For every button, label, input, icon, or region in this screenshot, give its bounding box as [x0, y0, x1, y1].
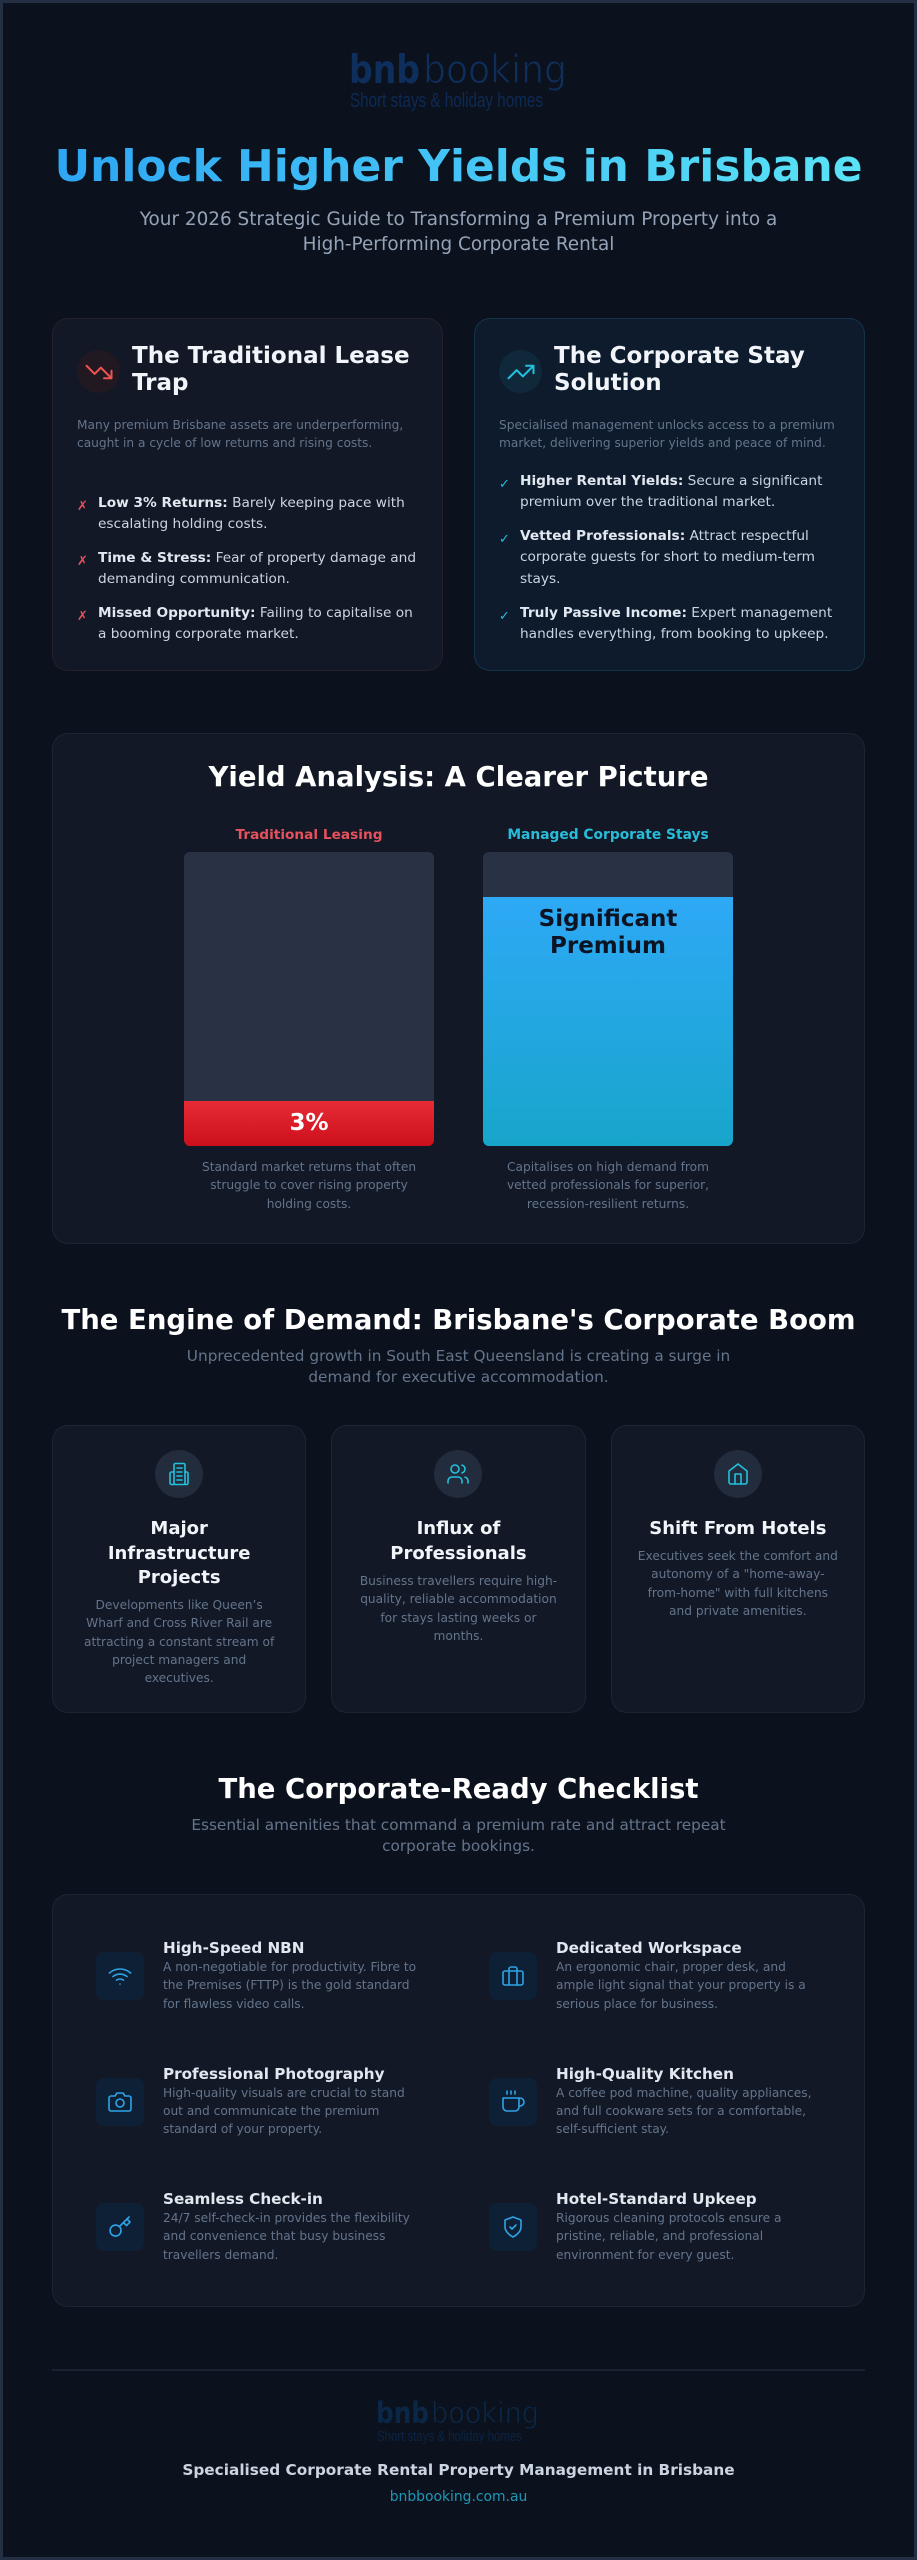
subheading: demand: demand for executive accommodation.	[308, 1368, 609, 1386]
card text: months.	[434, 1629, 483, 1643]
card text: for stays lasting weeks or	[380, 1611, 536, 1625]
caption: traditional: holding costs.	[267, 1197, 351, 1211]
heading: Trap	[132, 370, 188, 396]
icon: shield check	[489, 2203, 537, 2251]
list item: vetted professionals: stays.	[520, 570, 560, 586]
card text: Business travellers require high-	[360, 1574, 557, 1588]
description: caught in a cycle of low returns and rising costs.	[77, 436, 372, 450]
heading	[132, 342, 410, 396]
item text	[556, 1960, 806, 2011]
list item: missed opportunity	[98, 604, 413, 642]
item text	[556, 2211, 782, 2262]
item text	[163, 2211, 410, 2262]
logo: bnbbooking header: bnb	[349, 48, 420, 93]
item title: Seamless Check-in	[163, 2190, 323, 2208]
item title: High-Speed NBN	[163, 1939, 304, 1957]
panel: corporate stay solution	[474, 318, 865, 671]
item text: serious place for business.	[556, 1997, 718, 2011]
heading: engine of demand: The Engine of Demand: Brisbane's Corporate Boom	[61, 1304, 856, 1336]
list item: missed opportunity: Missed Opportunity: Failing to capitalise on	[98, 604, 413, 620]
marker: ✗	[77, 554, 88, 569]
item: upkeep	[489, 2190, 782, 2262]
subtitle: High-Performing Corporate Rental	[303, 234, 614, 255]
item text: Rigorous cleaning protocols ensure a	[556, 2211, 782, 2225]
item text: ample light signal that your property is a	[556, 1978, 806, 1992]
heading: checklist: The Corporate-Ready Checklist	[218, 1773, 699, 1805]
panel: shift from hotels	[611, 1425, 865, 1713]
logo: footer: bnb	[376, 2396, 429, 2430]
card text: attracting a constant stream of	[84, 1635, 274, 1649]
heading: The Corporate Stay	[554, 342, 805, 368]
icon: users	[434, 1450, 482, 1498]
fill: significant premium: Premium	[550, 933, 666, 959]
caption: managed	[507, 1160, 709, 1211]
card heading: Professionals	[390, 1542, 527, 1564]
footer link: bnbbooking.com.au	[390, 2489, 527, 2505]
caption: traditional	[202, 1160, 416, 1211]
caption: managed: recession-resilient returns.	[527, 1197, 689, 1211]
item text: out and communicate the premium	[163, 2104, 379, 2118]
heading: Solution	[554, 370, 662, 396]
list item: time and stress: Time & Stress: Fear of property damage and	[98, 550, 416, 566]
marker: ✗	[77, 499, 88, 514]
item: professional photography	[96, 2064, 405, 2136]
heading	[554, 342, 805, 396]
list item: higher yields: premium over the traditional market.	[520, 494, 775, 510]
subtitle	[140, 209, 777, 255]
icon: briefcase	[489, 1952, 537, 2000]
list item: vetted professionals	[520, 528, 815, 586]
card heading	[390, 1518, 527, 1564]
description: Many premium Brisbane assets are underperforming,	[77, 418, 403, 432]
icon: camera	[96, 2078, 144, 2126]
caption: traditional: struggle to cover rising property	[210, 1178, 408, 1192]
card heading	[108, 1518, 250, 1588]
icon: wifi	[96, 1952, 144, 2000]
item text: for flawless video calls.	[163, 1997, 305, 2011]
item title: Hotel-Standard Upkeep	[556, 2190, 757, 2208]
card text: Executives seek the comfort and	[638, 1549, 838, 1563]
item text: pristine, reliable, and professional	[556, 2229, 763, 2243]
fill: 3%	[184, 1101, 434, 1146]
item text	[556, 2086, 811, 2136]
subheading: demand: Unprecedented growth in South East Queensland is creating a surge in	[187, 1347, 730, 1365]
marker: ✗	[77, 609, 88, 624]
fill: significant premium	[483, 897, 733, 1146]
card text: Wharf and Cross River Rail are	[86, 1616, 272, 1630]
item text: A non-negotiable for productivity. Fibre to	[163, 1960, 416, 1974]
item text: environment for every guest.	[556, 2248, 734, 2262]
icon: home	[714, 1450, 762, 1498]
list item: higher yields	[520, 472, 822, 510]
description	[77, 418, 403, 450]
fill: significant premium: Significant	[539, 906, 677, 932]
footer text: Specialised Corporate Rental Property Management in Brisbane	[182, 2461, 735, 2479]
item: dedicated workspace	[489, 1939, 806, 2011]
subtitle: Your 2026 Strategic Guide to Transforming a Premium Property into a	[140, 209, 777, 230]
subheading: checklist: Essential amenities that command a premium rate and attract repeat	[191, 1816, 726, 1834]
card text: project managers and	[112, 1653, 246, 1667]
list item: passive income	[520, 604, 832, 642]
list item: low returns: escalating holding costs.	[98, 516, 267, 532]
bar: traditional 3%	[184, 852, 434, 1146]
panel: professionals	[331, 1425, 586, 1713]
item text: An ergonomic chair, proper desk, and	[556, 1960, 786, 1974]
list item: vetted professionals: corporate guests for short to medium-term	[520, 549, 815, 565]
list item: passive income: handles everything, from booking to upkeep.	[520, 626, 829, 642]
card text: from-home" with full kitchens	[648, 1586, 828, 1600]
subheading: demand	[187, 1347, 730, 1386]
card heading: Shift From Hotels	[649, 1518, 826, 1539]
card heading: Projects	[138, 1567, 221, 1588]
card text	[638, 1549, 838, 1618]
description: Specialised management unlocks access to a premium	[499, 418, 835, 432]
item text: standard of your property.	[163, 2122, 322, 2136]
panel: yield analysis	[52, 733, 865, 1244]
card text	[360, 1574, 557, 1643]
bar: managed corporate	[483, 852, 733, 1146]
icon: trending down	[77, 350, 120, 393]
item text	[163, 2086, 405, 2136]
item text: High-quality visuals are crucial to stand	[163, 2086, 405, 2100]
item text: and full cookware sets for a comfortable,	[556, 2104, 806, 2118]
card text	[84, 1598, 274, 1685]
list item: vetted professionals: Vetted Professionals: Attract respectful	[520, 528, 809, 544]
icon: trending up	[499, 350, 542, 393]
list item: time and stress: demanding communication.	[98, 571, 290, 587]
subheading: checklist	[191, 1816, 726, 1855]
item: high-speed NBN	[96, 1939, 416, 2011]
caption: traditional: Standard market returns that often	[202, 1160, 416, 1174]
item text: A coffee pod machine, quality appliances,	[556, 2086, 811, 2100]
caption: managed: vetted professionals for superior,	[507, 1178, 709, 1192]
item title: Dedicated Workspace	[556, 1939, 742, 1957]
card heading: Infrastructure	[108, 1542, 250, 1564]
logo: footer	[376, 2396, 539, 2445]
marker: ✓	[499, 532, 510, 547]
icon: building	[155, 1450, 203, 1498]
item text	[163, 1960, 416, 2011]
item title: High-Quality Kitchen	[556, 2064, 734, 2082]
subheading: checklist: corporate bookings.	[382, 1837, 535, 1855]
icon: key	[96, 2203, 144, 2251]
card text: executives.	[145, 1671, 214, 1685]
item: kitchen	[489, 2064, 811, 2136]
item text: and convenience that busy business	[163, 2229, 385, 2243]
panel: infrastructure	[52, 1425, 306, 1713]
card text: quality, reliable accommodation	[360, 1592, 557, 1606]
heading: yield analysis: Yield Analysis: A Clearer Picture	[208, 761, 709, 793]
heading: The Traditional Lease	[132, 342, 410, 368]
card text: Developments like Queen’s	[95, 1598, 263, 1612]
marker: ✓	[499, 477, 510, 492]
list item: higher yields: Higher Rental Yields: Secure a significant	[520, 472, 822, 488]
list item: time and stress	[98, 550, 416, 587]
logo: footer: booking	[431, 2396, 539, 2430]
item: check-in	[96, 2190, 410, 2262]
list item: low returns	[98, 494, 405, 532]
caption: managed: Capitalises on high demand from	[507, 1160, 709, 1174]
panel: traditional lease trap	[52, 318, 443, 671]
card text: autonomy of a "home-away-	[651, 1567, 825, 1581]
item title: Professional Photography	[163, 2064, 385, 2082]
list item: low returns: Low 3% Returns: Barely keeping pace with	[98, 494, 405, 510]
list item: missed opportunity: a booming corporate market.	[98, 626, 299, 642]
logo: bnbbooking header: booking	[423, 48, 567, 93]
icon: coffee	[489, 2078, 537, 2126]
panel: checklist	[52, 1894, 865, 2307]
card heading: Influx of	[417, 1518, 500, 1539]
fill: 3%: 3%	[289, 1110, 329, 1136]
description: market, delivering superior yields and peace of mind.	[499, 436, 826, 450]
title: Unlock Higher Yields in Brisbane	[54, 140, 863, 192]
item text: 24/7 self-check-in provides the flexibility	[163, 2211, 410, 2225]
card heading: Major	[150, 1518, 208, 1539]
bar label: traditional: Traditional Leasing	[235, 827, 382, 843]
item text: travellers demand.	[163, 2248, 278, 2262]
marker: ✓	[499, 609, 510, 624]
card text: and private amenities.	[669, 1604, 807, 1618]
item text: the Premises (FTTP) is the gold standard	[163, 1978, 410, 1992]
list item: passive income: Truly Passive Income: Expert management	[520, 604, 832, 620]
item text: self-sufficient stay.	[556, 2122, 669, 2136]
description	[499, 418, 835, 450]
logo: bnbbooking header	[349, 48, 567, 112]
bar label: managed: Managed Corporate Stays	[507, 827, 709, 843]
